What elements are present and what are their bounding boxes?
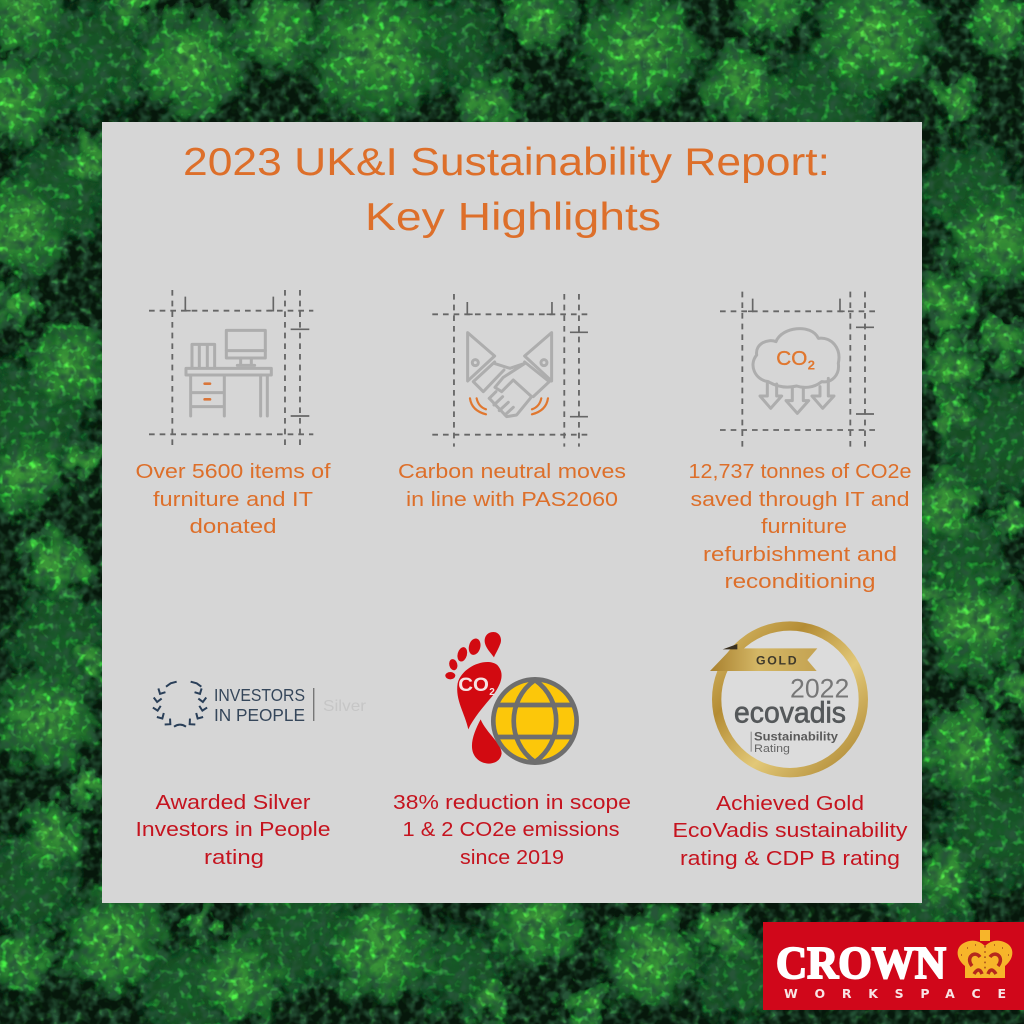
logo: Investors in People: Silver <box>323 698 367 715</box>
logo: Crown Workspace: CROWN <box>776 937 946 988</box>
text: CO2e saved: refurbishment and <box>703 543 897 566</box>
text: furniture donated: Over 5600 items of <box>136 460 331 483</box>
logo: Crown Workspace: WORKSPACE <box>784 986 1006 1001</box>
logo: Crown Workspace <box>763 922 1024 1010</box>
text: CO2e saved: furniture <box>761 515 847 538</box>
text: furniture donated: donated <box>190 515 276 538</box>
text: furniture donated <box>136 460 331 538</box>
text: Investors in People award: Investors in People <box>136 818 330 841</box>
text: furniture donated: furniture and IT <box>153 488 314 511</box>
text: emissions reduction: 38% reduction in scope <box>393 791 631 814</box>
text: emissions reduction: 1 & 2 CO2e emissions <box>402 818 620 841</box>
text: emissions reduction: since 2019 <box>460 846 564 869</box>
text: EcoVadis rating <box>672 792 908 870</box>
logo: Investors in People <box>153 682 367 727</box>
text: Investors in People award <box>136 791 330 869</box>
logo: Investors in People: INVESTORS <box>214 685 305 705</box>
text: Investors in People award: rating <box>204 846 264 869</box>
text: carbon neutral moves: in line with PAS2060 <box>406 488 618 511</box>
badge: EcoVadis Gold 2022 <box>710 626 863 773</box>
badge: EcoVadis Gold 2022: Sustainability <box>754 729 838 743</box>
text: CO2e saved: reconditioning <box>724 570 876 593</box>
title: Key Highlights <box>365 196 661 239</box>
text: carbon neutral moves <box>398 460 626 511</box>
panel <box>102 122 922 903</box>
badge: EcoVadis Gold 2022: Rating <box>754 743 790 755</box>
badge: EcoVadis Gold 2022: 2022 <box>790 673 849 703</box>
icon: handshake <box>432 294 592 447</box>
text: CO2e saved: saved through IT and <box>690 488 910 511</box>
icon: CO2 footprint and globe: 2 <box>489 687 495 698</box>
text: EcoVadis rating: EcoVadis sustainability <box>672 819 908 842</box>
text: Investors in People award: Awarded Silver <box>156 791 311 814</box>
text: emissions reduction <box>393 791 631 869</box>
title <box>183 141 830 239</box>
text: CO2e saved: 12,737 tonnes of CO2e <box>688 460 912 483</box>
text: carbon neutral moves: Carbon neutral moves <box>398 460 626 483</box>
icon: crown <box>958 930 1012 978</box>
text: EcoVadis rating: Achieved Gold <box>716 792 864 815</box>
icon: CO2 footprint and globe <box>445 632 577 764</box>
icon: CO2 cloud: 2 <box>808 358 815 373</box>
text: CO2e saved <box>688 460 912 593</box>
logo: Investors in People: IN PEOPLE <box>214 705 305 725</box>
text: EcoVadis rating: rating & CDP B rating <box>680 847 900 870</box>
icon: CO2 cloud: CO <box>776 348 807 370</box>
icon: office desk <box>149 290 313 447</box>
badge: EcoVadis Gold 2022: ecovadis <box>734 697 846 730</box>
badge: EcoVadis Gold 2022: GOLD <box>756 653 797 667</box>
title: 2023 UK&I Sustainability Report: <box>183 141 830 184</box>
icon: CO2 footprint and globe: CO <box>458 675 489 696</box>
icon: CO2 cloud <box>720 292 877 448</box>
